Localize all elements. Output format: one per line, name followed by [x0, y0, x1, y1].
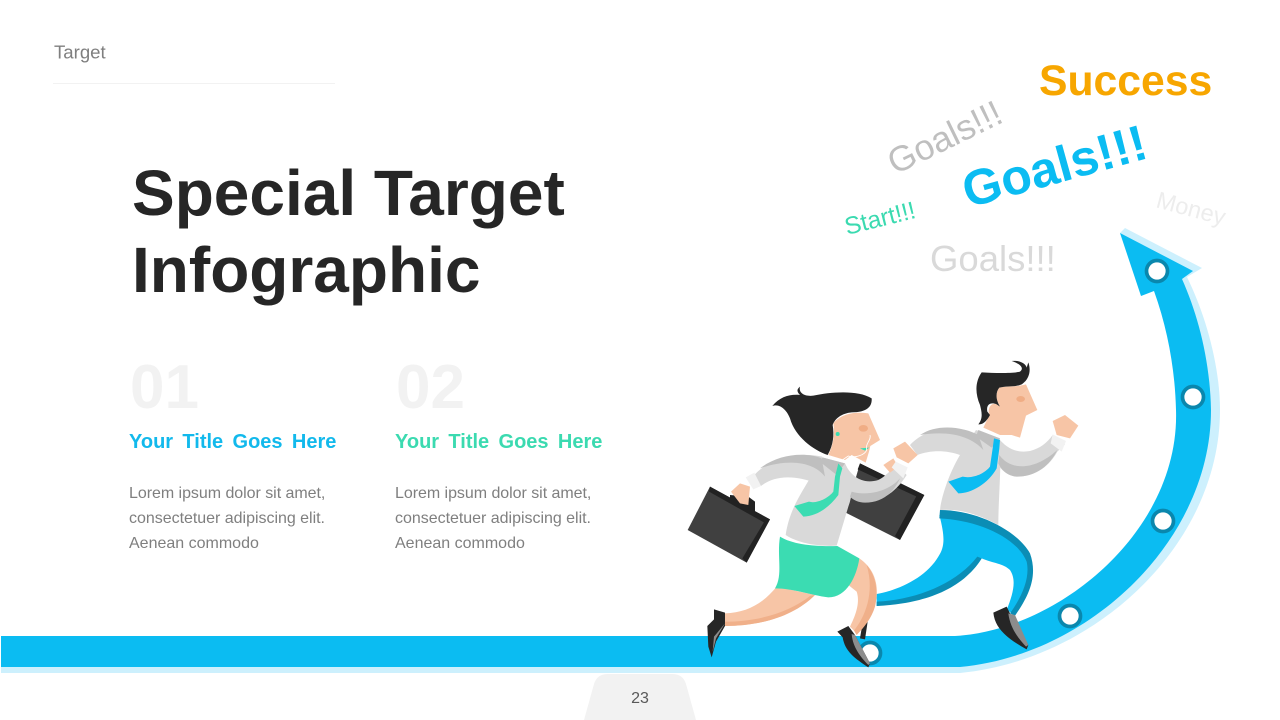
- woman tie: [794, 463, 842, 517]
- column 2 body: Lorem ipsum dolor sit amet,: [395, 485, 591, 502]
- section label: Target: [54, 42, 107, 62]
- number 02: 02: [396, 353, 465, 422]
- column 1 body: Lorem ipsum dolor sit amet,: [129, 485, 325, 502]
- column 1: [129, 353, 336, 552]
- woman skirt: [775, 537, 859, 597]
- woman cuff: [746, 473, 761, 489]
- man upper body: [910, 361, 1078, 525]
- man fist: [1053, 415, 1078, 438]
- woman hand: [731, 483, 750, 505]
- man briefcase: [846, 463, 924, 540]
- woman collar: [821, 457, 845, 475]
- woman legs and skirt: [707, 537, 877, 667]
- man hair: [976, 361, 1030, 424]
- man lower seam: [877, 557, 982, 606]
- man face: [983, 384, 1037, 438]
- man waistband and outer seam: [939, 510, 1033, 616]
- woman torso: [786, 457, 852, 546]
- word: Start: Start!!!: [842, 197, 918, 241]
- milestone dots: [860, 260, 1204, 664]
- woman mouth: [860, 448, 869, 451]
- man back fist: [893, 442, 918, 463]
- column 2 body: consectetuer adipiscing elit.: [395, 510, 591, 527]
- word: Success: Success: [1039, 57, 1212, 105]
- title: Infographic: [132, 234, 480, 306]
- woman briefcase: [688, 487, 770, 563]
- man collar: [976, 430, 1000, 448]
- man front shoe: [993, 607, 1028, 649]
- page number tab: [584, 674, 696, 720]
- man legs: [860, 510, 1033, 649]
- column 1 heading: Your Title Goes Here: [129, 431, 336, 453]
- column 2 body: Aenean commodo: [395, 535, 525, 552]
- word: Goals blue: Goals!!!: [956, 114, 1153, 219]
- woman front leg: [848, 558, 877, 633]
- woman face: [828, 413, 880, 463]
- woman hair: [772, 387, 872, 455]
- column 2 heading: Your Title Goes Here: [395, 431, 602, 453]
- growth arrow: [1, 228, 1220, 673]
- man front arm: [997, 435, 1065, 477]
- woman earring: [836, 432, 840, 436]
- woman back shoe: [707, 609, 725, 657]
- woman front hand: [883, 458, 898, 473]
- column 2: [395, 353, 602, 552]
- title: Special Target: [132, 157, 565, 229]
- woman headset wire: [842, 435, 870, 460]
- man cuff: [1051, 434, 1066, 452]
- woman front shoe: [837, 626, 870, 667]
- man tie: [948, 438, 1000, 493]
- arrow body: [1, 233, 1211, 667]
- man back arm: [910, 428, 978, 455]
- woman back leg: [725, 587, 815, 626]
- page number: 23: [631, 690, 649, 707]
- word: Goals grey: Goals!!!: [881, 93, 1008, 182]
- woman back arm: [754, 455, 822, 486]
- woman upper body: [731, 387, 918, 546]
- word: Money: Money: [1154, 187, 1229, 230]
- woman front arm: [845, 463, 907, 502]
- man torso: [940, 430, 1000, 525]
- man trousers: [877, 515, 1029, 615]
- column 1 body: consectetuer adipiscing elit.: [129, 510, 325, 527]
- number 01: 01: [130, 353, 199, 422]
- woman front cuff: [892, 462, 908, 478]
- man back foot: [860, 622, 868, 639]
- word: Goals light: Goals!!!: [930, 238, 1056, 279]
- arrow shadow: [1, 228, 1220, 673]
- column 1 body: Aenean commodo: [129, 535, 259, 552]
